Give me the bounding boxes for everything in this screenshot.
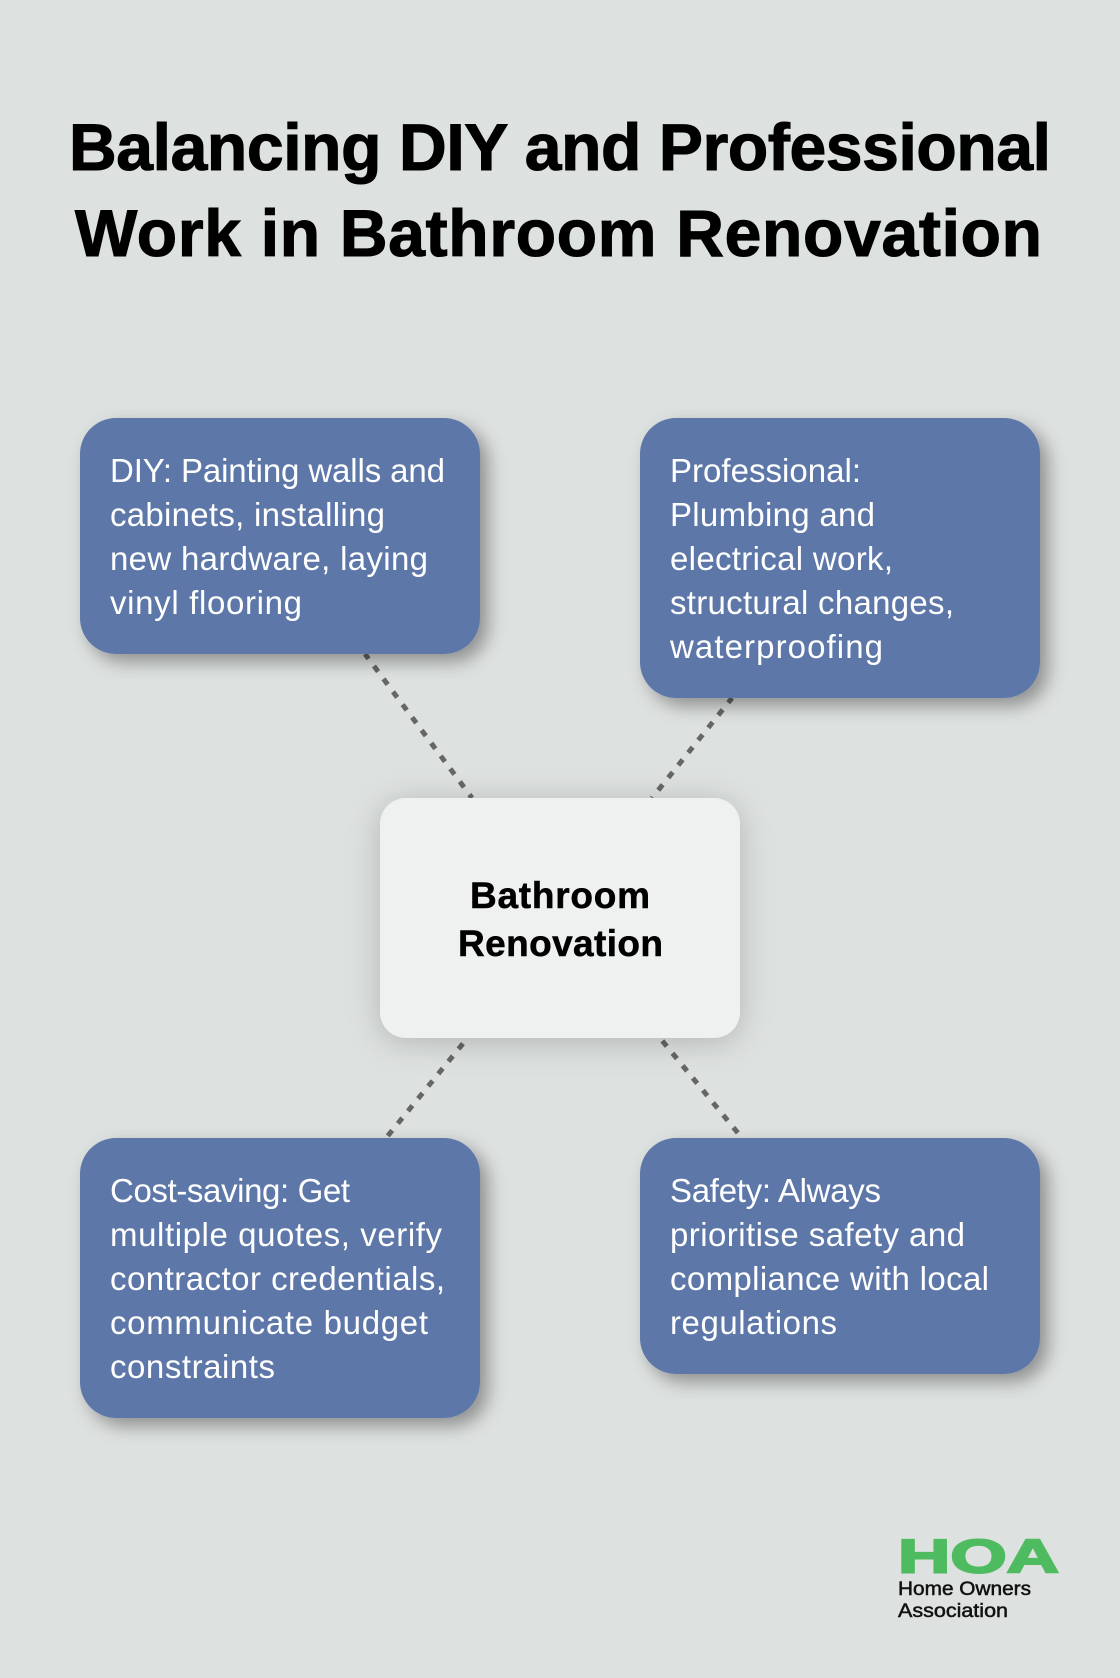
text: Cost-saving: contractor credentials, [110, 1260, 445, 1297]
text: Professional: electrical work, [670, 540, 893, 577]
arrow: DIY connector [365, 654, 472, 798]
text: Bathroom Renovation [458, 875, 663, 964]
logo wordmark: Association [898, 1601, 1008, 1622]
text: DIY: vinyl flooring [110, 584, 302, 621]
logo: Home Owners Association [898, 1530, 1059, 1622]
title [69, 110, 1051, 270]
logo wordmark [898, 1579, 1031, 1622]
text: Professional: Professional: [670, 452, 861, 489]
arrow: cost-saving connector [386, 1038, 468, 1138]
arrow: professional connector [652, 698, 732, 798]
text: Professional: structural changes, [670, 584, 954, 621]
text: Professional: waterproofing [669, 628, 883, 665]
logo mark: HOA: HOA [898, 1530, 1059, 1582]
text: Cost-saving: communicate budget [110, 1304, 428, 1341]
title: Work in Bathroom Renovation [75, 196, 1042, 270]
panel: central topic [380, 798, 740, 1038]
text: DIY: cabinets, installing [110, 496, 385, 533]
text: DIY [110, 452, 445, 621]
text: Safety: compliance with local [670, 1260, 989, 1297]
panel: DIY [80, 418, 480, 654]
text: Safety: regulations [670, 1304, 837, 1341]
logo wordmark: Home Owners [898, 1579, 1031, 1600]
title: Balancing DIY and Professional [69, 110, 1051, 184]
text: Cost-saving: constraints [110, 1348, 275, 1385]
text: Professional [669, 452, 954, 665]
text: Safety [670, 1172, 989, 1341]
text: Cost-saving: multiple quotes, verify [110, 1216, 442, 1253]
text: DIY: DIY: Painting walls and [110, 452, 445, 489]
text: Bathroom Renovation: Bathroom [470, 875, 650, 916]
panel: Professional [640, 418, 1040, 698]
text: Bathroom Renovation: Renovation [458, 923, 663, 964]
arrow: safety connector [660, 1038, 742, 1138]
text: DIY: new hardware, laying [110, 540, 428, 577]
panel: Safety [640, 1138, 1040, 1374]
text: Safety: Safety: Always [670, 1172, 881, 1209]
text: Safety: prioritise safety and [670, 1216, 965, 1253]
text: Cost-saving: Cost-saving: Get [110, 1172, 350, 1209]
text: Professional: Plumbing and [670, 496, 875, 533]
panel: Cost-saving [80, 1138, 480, 1418]
text: Cost-saving [110, 1172, 445, 1385]
